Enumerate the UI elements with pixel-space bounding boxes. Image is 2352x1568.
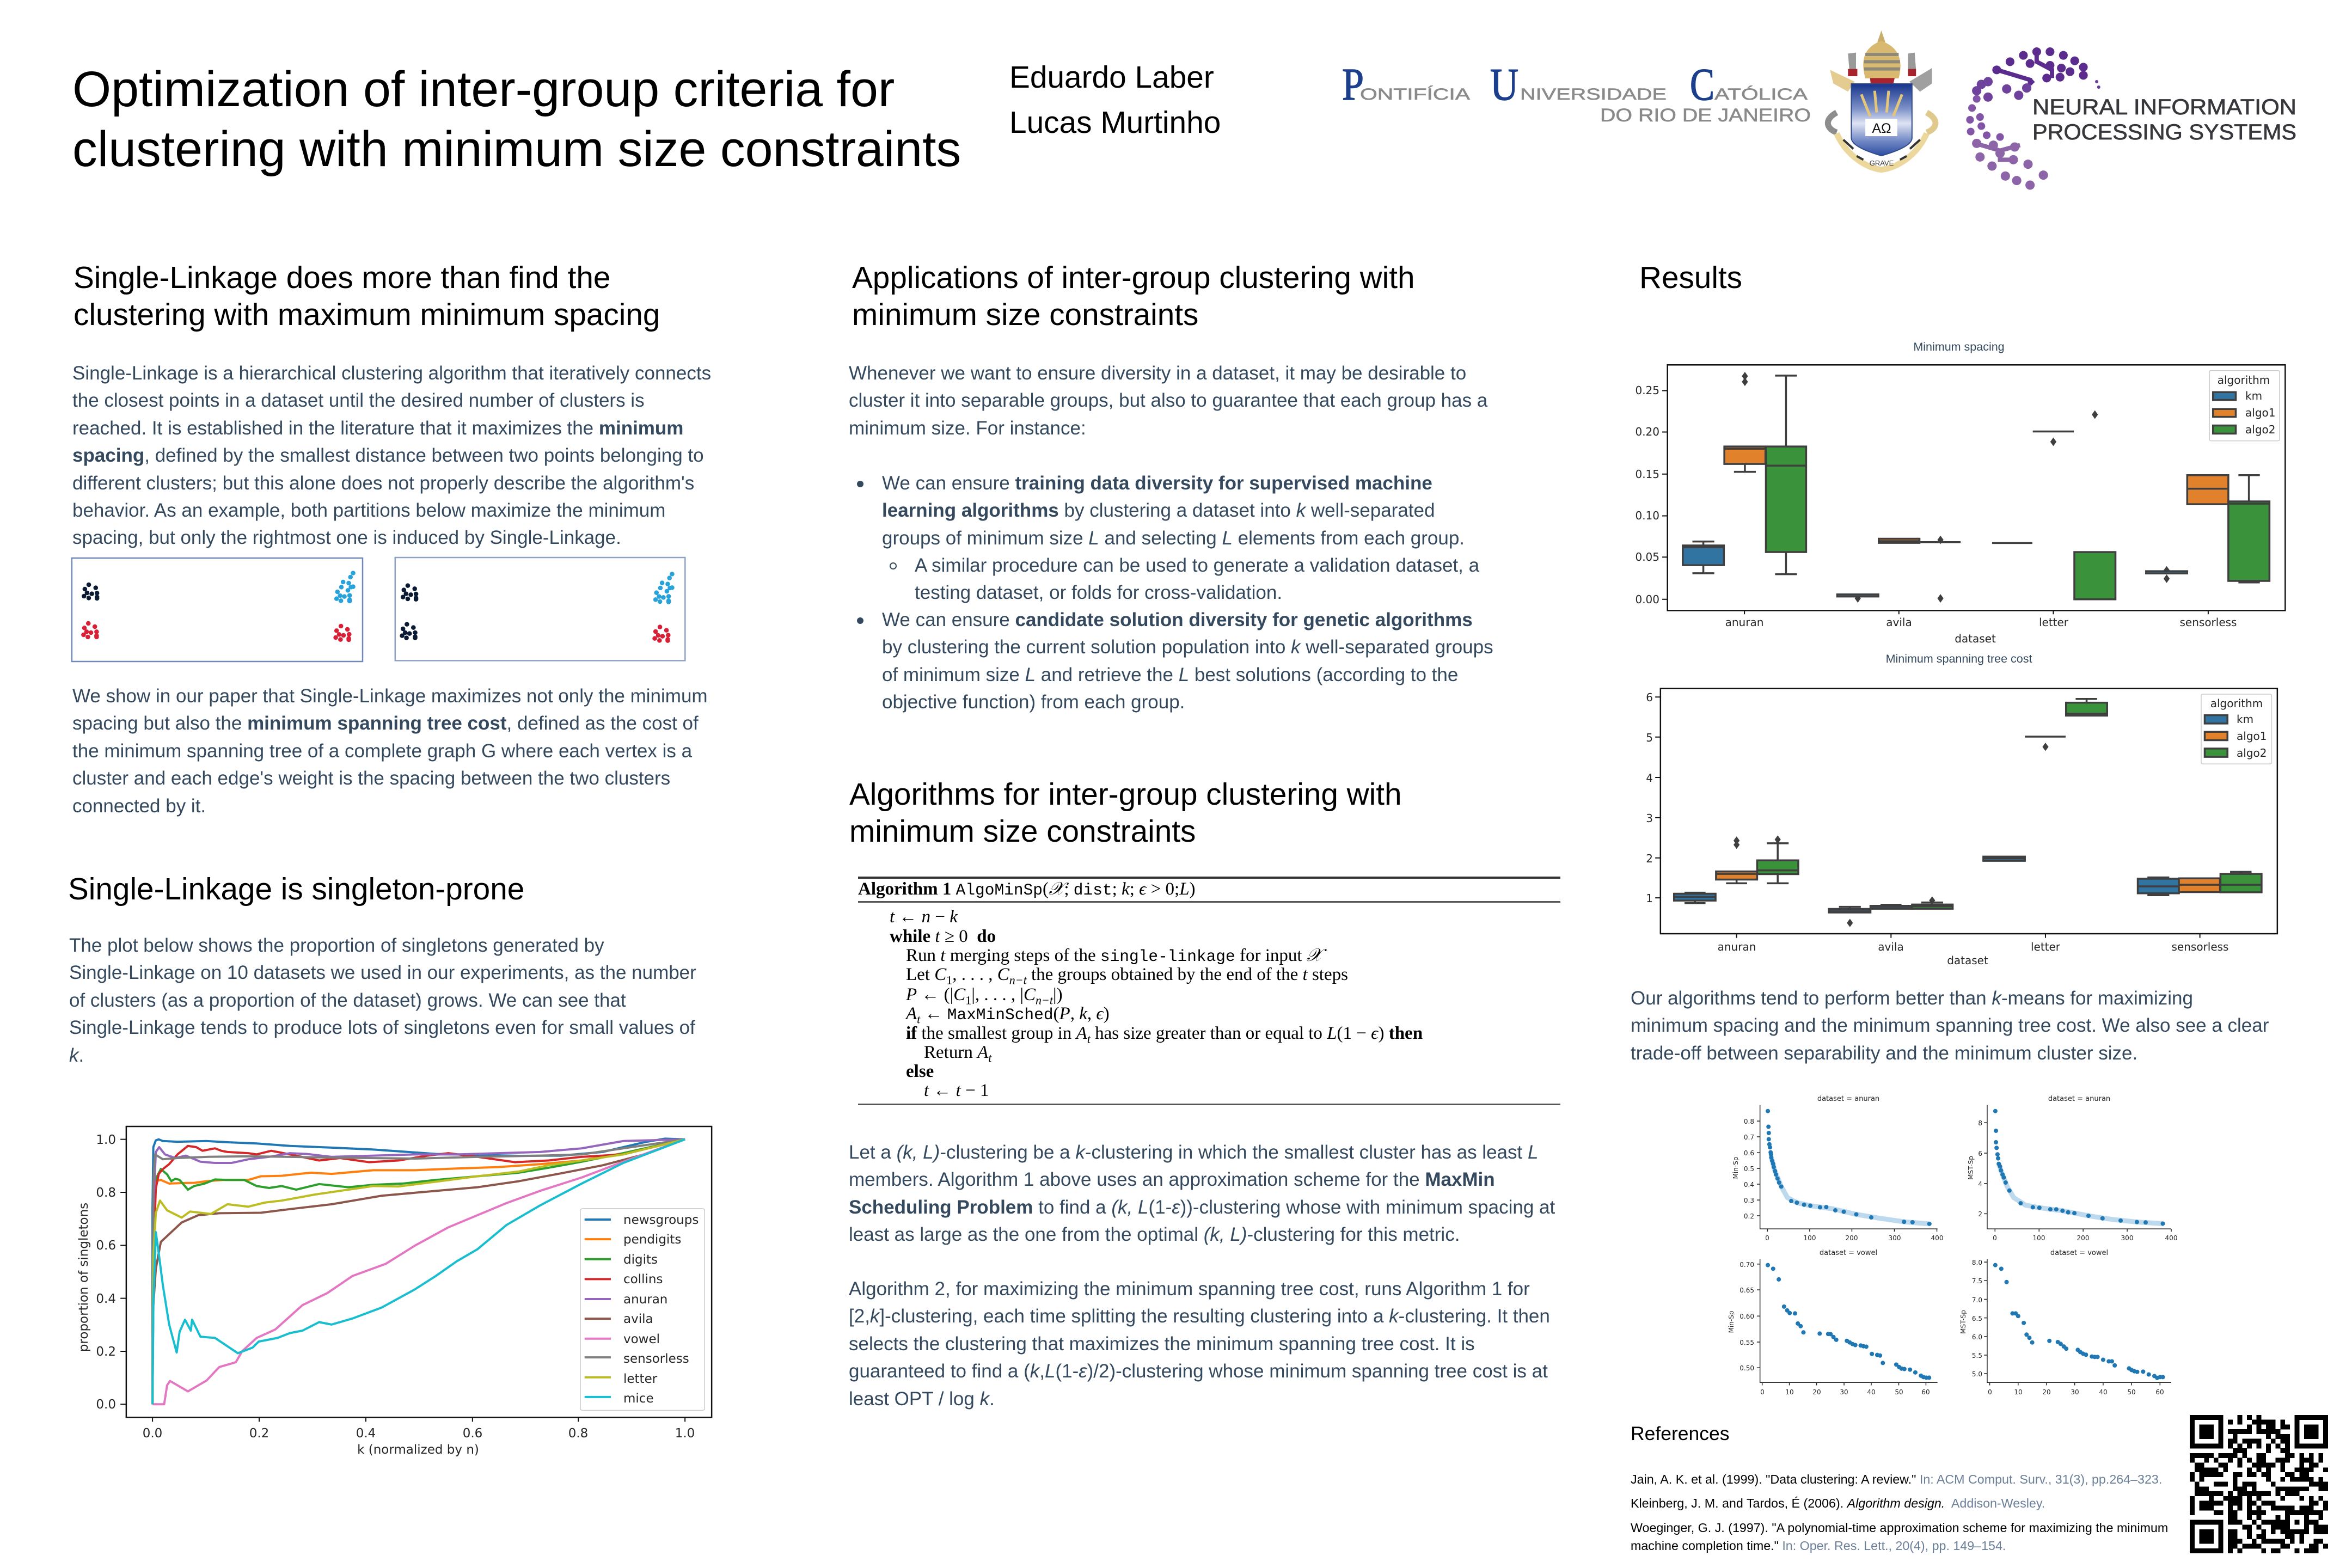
text: minimum spanning tree cost: connected by it. (72, 795, 206, 817)
text: applications intro: Whenever we want to ensure diversity in a dataset, it may be desirable to (849, 363, 1466, 384)
logo: PUC-Rio wordmark (1342, 59, 1811, 126)
scatter plot text: 6.0 (1972, 1333, 1982, 1341)
chart axis text: algo1 (2245, 406, 2275, 419)
box plot: minimum spacing (1633, 338, 2319, 648)
title (72, 62, 961, 177)
bullet: training data diversity: groups of minimum size L and selecting L elements from each group. (882, 528, 1465, 549)
text: single-linkage intro (72, 363, 711, 548)
scatter plot text: 100 (2033, 1234, 2045, 1242)
scatter plot text: 40 (2099, 1388, 2108, 1396)
scatter plot text: 0.55 (1739, 1339, 1754, 1346)
text: single-linkage intro: Single-Linkage is a hierarchical clustering algorithm that iteratively connects (72, 363, 711, 384)
line chart: proportion of singletons: sensorless (623, 1352, 689, 1366)
figure: two example partitions (71, 556, 686, 662)
line chart: proportion of singletons (77, 1126, 712, 1457)
heading: applications (852, 261, 1414, 332)
line chart: proportion of singletons: anuran (623, 1293, 667, 1307)
algorithm 1 pseudocode: At ← MaxMinSched(P, k, ϵ) (906, 1004, 1110, 1026)
chart axis text: 0.00 (1635, 593, 1659, 606)
chart axis text: 0.05 (1635, 550, 1659, 564)
text: minimum spanning tree cost: We show in our paper that Single-Linkage maximizes not only the minimum (72, 685, 708, 707)
text: minimum spanning tree cost: cluster and each edge's weight is the spacing between the two clusters (72, 768, 670, 789)
algorithm 1 pseudocode (858, 871, 1560, 1111)
panel: anuran mst-sp (1984, 1105, 2171, 1232)
text: singleton plot description: Single-Linkage tends to produce lots of singletons even for small values of (69, 1017, 695, 1038)
references list: machine completion time." In: Oper. Res. Lett., 20(4), pp. 149–154. (1631, 1539, 2006, 1553)
chart axis text: 6 (1646, 691, 1653, 704)
line chart: proportion of singletons: proportion of singletons (77, 1203, 91, 1352)
scatter plot text: 50 (1895, 1388, 1903, 1396)
scatter plot text: 0.5 (1744, 1165, 1754, 1173)
heading: applications: minimum size constraints (852, 298, 1198, 332)
scatter plot text: 200 (2077, 1234, 2089, 1242)
scatter plot text: 6.5 (1972, 1315, 1982, 1322)
text: single-linkage intro: different clusters; but this alone does not properly describe the algorithm's (72, 473, 694, 494)
references list: Jain, A. K. et al. (1999). "Data clustering: A review." In: ACM Comput. Surv., 31(3), pp.264–323. (1631, 1472, 2162, 1486)
scatter plot text: 0.4 (1744, 1181, 1754, 1189)
scatter plot text: MST-Sp (1967, 1156, 1975, 1180)
heading: singleton-prone: Single-Linkage is singleton-prone (68, 872, 524, 906)
bullet: training data diversity: learning algorithms by clustering a dataset into k well-separated (882, 500, 1435, 521)
line chart: proportion of singletons: 0.6 (463, 1426, 482, 1441)
logo: PUC-Rio wordmark: U (1490, 59, 1518, 110)
heading: algorithms: minimum size constraints (849, 814, 1196, 849)
logo: PUC-Rio wordmark: NIVERSIDADE (1520, 85, 1667, 103)
logo: NeurIPS wordmark: NEURAL INFORMATION (2032, 95, 2296, 119)
line chart: proportion of singletons: 0.8 (568, 1426, 588, 1441)
chart axis text: avila (1886, 616, 1912, 629)
text: algorithm 1 description (849, 1139, 1555, 1249)
chart axis text: anuran (1725, 616, 1763, 629)
chart axis text: 0.15 (1635, 468, 1659, 481)
chart axis text: sensorless (2180, 616, 2237, 629)
panel: vowel min-sp (1757, 1259, 1938, 1385)
QR code (2190, 1415, 2328, 1553)
scatter plot text: 10 (2014, 1388, 2023, 1396)
heading: single-linkage spacing (74, 261, 660, 332)
chart axis text: 0.10 (1635, 509, 1659, 522)
line chart: proportion of singletons: vowel (623, 1332, 660, 1346)
chart axis text: 3 (1646, 812, 1653, 825)
references list: Kleinberg, J. M. and Tardos, É (2006). Algorithm design. Addison-Wesley. (1631, 1496, 2045, 1510)
scatter plot text: 60 (2155, 1388, 2164, 1396)
algorithm 1 pseudocode: P ← (|C1|, . . . , |Cn−t|) (906, 985, 1063, 1007)
bullet: candidate solution diversity: by clustering the current solution population into k well-separated groups (882, 636, 1493, 658)
scatter plot text: 0 (1993, 1234, 1997, 1242)
chart axis text: sensorless (2172, 940, 2228, 953)
line chart: proportion of singletons: 0.4 (356, 1426, 376, 1441)
sub-bullet: validation dataset: testing dataset, or folds for cross-validation. (915, 582, 1282, 603)
scatter plot text: 8.0 (1972, 1259, 1982, 1266)
line chart: proportion of singletons: 0.2 (96, 1345, 116, 1359)
text: results summary: trade-off between separability and the minimum cluster size. (1631, 1043, 2137, 1064)
sub-bullet: validation dataset: A similar procedure can be used to generate a validation dataset, a (915, 555, 1479, 576)
sub-bullet: validation dataset (915, 552, 1479, 607)
text: algorithm 1 description: Let a (k, L)-clustering be a k-clustering in which the smallest cluster has as least L (849, 1142, 1538, 1163)
line chart: proportion of singletons: newsgroups (623, 1213, 699, 1227)
bullet: training data diversity: We can ensure training data diversity for supervised machine (882, 473, 1432, 494)
scatter plot text: 0.2 (1744, 1212, 1754, 1220)
text: single-linkage intro: behavior. As an example, both partitions below maximize the minimum (72, 500, 665, 521)
algorithm 1 pseudocode: if the smallest group in At has size greater than or equal to L(1 − ϵ) then (906, 1024, 1423, 1046)
logo: NeurIPS mark of dots (1966, 47, 2100, 189)
algorithm 1 pseudocode: Let C1, . . . , Cn−t the groups obtained by the end of the t steps (906, 965, 1348, 987)
title: clustering with minimum size constraints (72, 121, 961, 177)
text: applications intro: minimum size. For instance: (849, 418, 1086, 439)
bullet: candidate solution diversity: We can ensure candidate solution diversity for genetic algorithms (882, 609, 1473, 630)
text: single-linkage intro: reached. It is established in the literature that it maximizes the minimum (72, 418, 683, 439)
scatter plot text: 0.8 (1744, 1118, 1754, 1125)
chart axis text (1635, 373, 2275, 645)
logo: PUC-Rio crest: ΑΩ (1872, 121, 1891, 136)
scatter plot text: MST-Sp (1959, 1310, 1967, 1334)
text: singleton plot description: of clusters (as a proportion of the dataset) grows. We can see that (69, 990, 626, 1011)
scatter plot text: 7.0 (1972, 1296, 1982, 1304)
line chart: proportion of singletons: pendigits (623, 1233, 681, 1247)
heading: single-linkage spacing: clustering with maximum minimum spacing (74, 298, 660, 332)
line chart: proportion of singletons: collins (623, 1272, 663, 1287)
logo: NeurIPS wordmark: PROCESSING SYSTEMS (2032, 120, 2296, 144)
logo: PUC-Rio crest (1825, 30, 1938, 173)
text: single-linkage intro: spacing, defined by the smallest distance between two points belonging to (72, 445, 704, 466)
bullet list: applications (849, 470, 1530, 726)
scatter plot text: 100 (1804, 1234, 1816, 1242)
scatter plot text: dataset = vowel (1820, 1249, 1877, 1257)
line chart: proportion of singletons: digits (623, 1253, 658, 1267)
panel: vowel mst-sp (1984, 1259, 2171, 1385)
text: applications intro: cluster it into separable groups, but also to guarantee that each group has a (849, 390, 1487, 411)
chart axis text (1646, 691, 2267, 967)
text: algorithm 2 description: Algorithm 2, for maximizing the minimum spanning tree cost, runs Algorithm 1 for (849, 1278, 1530, 1300)
line chart: proportion of singletons: mice (623, 1392, 654, 1406)
chart axis text: dataset (1947, 954, 1988, 967)
line chart: proportion of singletons: 0.2 (249, 1426, 269, 1441)
references list: Woeginger, G. J. (1997). "A polynomial-time approximation scheme for maximizing the minimum (1631, 1521, 2168, 1535)
scatter plot text: 20 (1812, 1388, 1821, 1396)
heading: algorithms: Algorithms for inter-group clustering with (849, 777, 1401, 812)
text: single-linkage intro: the closest points in a dataset until the desired number of clusters is (72, 390, 645, 411)
algorithm 1 pseudocode: else (906, 1062, 934, 1081)
text: algorithm 2 description: guaranteed to find a (k,L(1-ε)/2)-clustering whose minimum spanning tree cost is at (849, 1361, 1548, 1382)
text: algorithm 1 description: Scheduling Problem to find a (k, L(1-ε))-clustering whose with minimum spacing at (849, 1197, 1555, 1218)
line chart: proportion of singletons: 1.0 (96, 1133, 116, 1147)
text: results summary: minimum spacing and the minimum spanning tree cost. We also see a clear (1631, 1015, 2269, 1036)
chart axis text: algo2 (2237, 746, 2267, 759)
scatter plot text: 2 (1978, 1210, 1982, 1218)
bullet: candidate solution diversity: objective function) from each group. (882, 691, 1185, 713)
bullet: candidate solution diversity: of minimum size L and retrieve the L best solutions (according to the (882, 664, 1458, 685)
text: minimum spanning tree cost (72, 685, 708, 817)
chart axis text: algo2 (2245, 423, 2275, 436)
text: results summary (1631, 985, 2269, 1067)
scatter plot text: 0.7 (1744, 1134, 1754, 1141)
right partition (395, 558, 685, 660)
title: Optimization of inter-group criteria for (72, 62, 895, 117)
logo: PUC-Rio wordmark: C (1690, 59, 1714, 110)
chart axis text: km (2245, 389, 2262, 402)
line chart: proportion of singletons: avila (623, 1312, 653, 1326)
scatter plot text: 6 (1978, 1150, 1982, 1157)
chart axis text: 5 (1646, 731, 1653, 744)
chart axis text: km (2237, 713, 2253, 726)
scatter plot text: 8 (1978, 1119, 1982, 1127)
scatter plot text: 30 (2071, 1388, 2079, 1396)
scatter plots: trade-off panels (1715, 1089, 2205, 1405)
text: applications intro (849, 363, 1487, 439)
scatter plot text: 300 (2121, 1234, 2133, 1242)
line chart: proportion of singletons: letter (623, 1372, 658, 1386)
line chart: proportion of singletons: 0.4 (96, 1292, 116, 1306)
chart axis text: 0.25 (1635, 384, 1659, 397)
text: algorithm 1 description: members. Algorithm 1 above uses an approximation scheme for the MaxMin (849, 1169, 1495, 1190)
logo: NeurIPS wordmark (2032, 95, 2296, 144)
chart axis text: 2 (1646, 852, 1653, 865)
authors: Eduardo Laber (1009, 60, 1214, 95)
algorithm 1 pseudocode: Run t merging steps of the single-linkage for input 𝒳 (906, 946, 1322, 966)
scatter plot text: dataset = anuran (1817, 1095, 1879, 1103)
text: minimum spanning tree cost: the minimum spanning tree of a complete graph G where each vertex is a (72, 740, 692, 762)
line chart: proportion of singletons: 0.6 (96, 1239, 116, 1253)
scatter plot text: 0.70 (1739, 1261, 1754, 1269)
scatter plot text: 0 (1988, 1388, 1992, 1396)
left partition (72, 558, 363, 661)
scatter plot text: Min-Sp (1728, 1311, 1735, 1333)
scatter plot text: 5.5 (1972, 1352, 1982, 1359)
text: singleton plot description: k. (69, 1045, 84, 1066)
chart axis text: 0.20 (1635, 425, 1659, 438)
text: algorithm 1 description: least as large as the one from the optimal (k, L)-clustering for this metric. (849, 1224, 1460, 1245)
chart axis text: anuran (1718, 940, 1756, 953)
bullet: candidate solution diversity (882, 607, 1493, 716)
scatter plot text (1728, 1095, 2177, 1396)
scatter plot text: dataset = vowel (2050, 1249, 2108, 1257)
chart axis text: letter (2039, 616, 2069, 629)
algorithm 1 pseudocode: while t ≥ 0 do (890, 927, 996, 946)
scatter plot text: dataset = anuran (2048, 1095, 2110, 1103)
algorithm 1 pseudocode: Algorithm 1 AlgoMinSp(𝒳; dist; k; ϵ > 0;L) (858, 879, 1196, 899)
scatter plot text: 50 (2127, 1388, 2136, 1396)
chart axis text: letter (2031, 940, 2061, 953)
scatter plot text: 0 (1765, 1234, 1769, 1242)
scatter plot text: 7.5 (1972, 1277, 1982, 1285)
line chart: proportion of singletons: 0.0 (96, 1398, 116, 1412)
algorithm 1 pseudocode: t ← n − k (890, 907, 958, 927)
scatter plot text: 0.65 (1739, 1287, 1754, 1294)
references list (1631, 1467, 2175, 1557)
text: results summary: Our algorithms tend to perform better than k-means for maximizing (1631, 988, 2193, 1009)
line chart: proportion of singletons: 1.0 (675, 1426, 695, 1441)
scatter plot text: 300 (1889, 1234, 1901, 1242)
text: algorithm 2 description (849, 1276, 1550, 1413)
scatter plot text: 400 (2165, 1234, 2177, 1242)
heading: references: References (1631, 1423, 1730, 1444)
algorithm 1 pseudocode: t ← t − 1 (924, 1081, 989, 1100)
authors: Lucas Murtinho (1009, 106, 1221, 140)
chart axis text: dataset (1955, 632, 1996, 645)
scatter plot text: 4 (1978, 1180, 1982, 1188)
scatter plot text: 200 (1846, 1234, 1858, 1242)
text: single-linkage intro: spacing, but only the rightmost one is induced by Single-Linkage. (72, 527, 621, 548)
chart axis text: algo1 (2237, 730, 2267, 743)
text: singleton plot description (69, 935, 696, 1066)
chart axis text: 1 (1646, 892, 1653, 905)
scatter plot text: 0.6 (1744, 1149, 1754, 1157)
chart axis text: avila (1878, 940, 1904, 953)
scatter plot text: 5.0 (1972, 1370, 1982, 1378)
chart title: Minimum spacing (1913, 340, 2005, 353)
scatter plot text: 0.50 (1739, 1364, 1754, 1372)
chart title: Minimum spanning tree cost (1886, 652, 2032, 665)
scatter plot text: 0.3 (1744, 1197, 1754, 1204)
chart axis text: 4 (1646, 771, 1653, 785)
text: algorithm 2 description: selects the clustering that maximizes the minimum spanning tree cost. It is (849, 1333, 1475, 1355)
text: minimum spanning tree cost: spacing but also the minimum spanning tree cost, defined as the cost of (72, 713, 699, 734)
panel: anuran min-sp (1757, 1105, 1938, 1232)
scatter plot text: 400 (1931, 1234, 1943, 1242)
logo: PUC-Rio crest: GRAVE (1870, 159, 1894, 167)
authors (1009, 60, 1221, 140)
logo: PUC-Rio wordmark: ONTIFÍCIA (1360, 85, 1470, 103)
heading: applications: Applications of inter-group clustering with (852, 261, 1414, 295)
chart axis text: algorithm (2210, 697, 2263, 710)
scatter plot text: 40 (1867, 1388, 1876, 1396)
heading: results: Results (1639, 261, 1742, 295)
scatter plot text: 20 (2042, 1388, 2051, 1396)
line chart: proportion of singletons: k (normalized by n) (357, 1443, 479, 1457)
heading: algorithms (849, 776, 1401, 850)
text: algorithm 2 description: least OPT / log k. (849, 1388, 995, 1410)
scatter plot text: 60 (1921, 1388, 1930, 1396)
text: singleton plot description: Single-Linkage on 10 datasets we used in our experiments, as the number (69, 962, 696, 983)
logo: PUC-Rio wordmark: P (1342, 59, 1364, 110)
text: algorithm 2 description: [2,k]-clustering, each time splitting the resulting clustering into a k-clustering. It then (849, 1306, 1550, 1327)
logo: PUC-Rio wordmark: DO RIO DE JANEIRO (1600, 105, 1811, 126)
line chart: proportion of singletons: 0.0 (143, 1426, 162, 1441)
line chart: proportion of singletons: 0.8 (96, 1186, 116, 1200)
scatter plot text: Min-Sp (1732, 1157, 1739, 1179)
bullet: training data diversity (882, 470, 1465, 552)
scatter plot text: 30 (1840, 1388, 1848, 1396)
logo: PUC-Rio wordmark: ATÓLICA (1714, 85, 1808, 103)
scatter plot text: 0 (1760, 1388, 1765, 1396)
scatter plot text: 10 (1785, 1388, 1794, 1396)
chart axis text: algorithm (2218, 373, 2270, 387)
box plot: minimum spanning tree cost (1633, 648, 2319, 975)
scatter plot text: 0.60 (1739, 1313, 1754, 1320)
text: singleton plot description: The plot below shows the proportion of singletons generated by (69, 935, 604, 956)
heading: single-linkage spacing: Single-Linkage does more than find the (74, 261, 610, 295)
algorithm 1 pseudocode: Return At (924, 1043, 991, 1065)
